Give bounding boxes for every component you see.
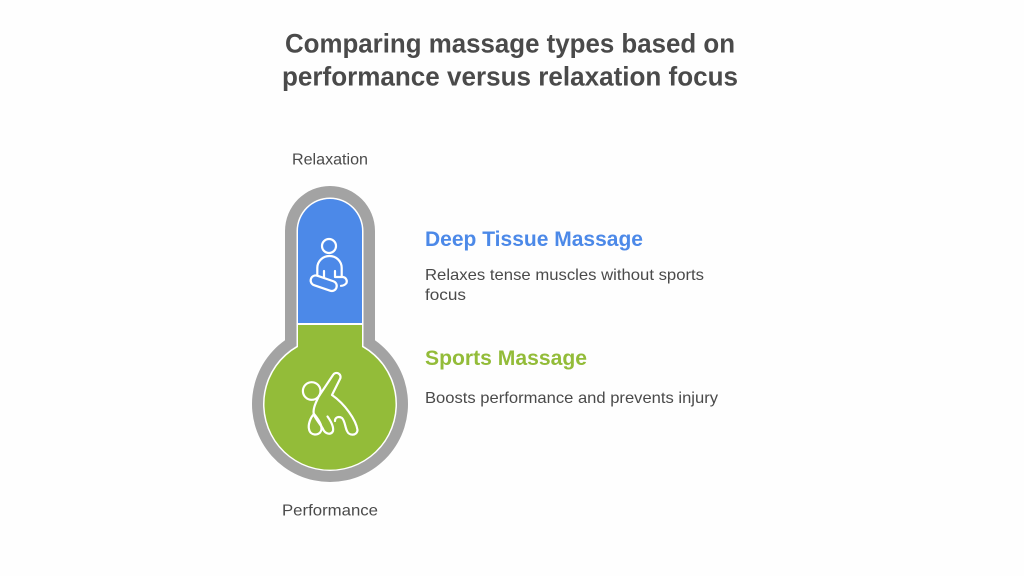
thermometer chart bbox=[252, 186, 408, 482]
icon: meditating person bbox=[309, 239, 347, 292]
text block: deep tissue massage bbox=[425, 227, 704, 304]
description: deep tissue massage: Relaxes tense muscles without sports bbox=[425, 267, 704, 284]
description: sports massage: Boosts performance and prevents injury bbox=[425, 390, 718, 407]
title: Comparing massage types based on bbox=[285, 28, 735, 58]
axis label: relaxation: Relaxation bbox=[292, 152, 368, 168]
thermometer outer shell bbox=[252, 186, 408, 482]
heading: sports massage: Sports Massage bbox=[425, 346, 587, 370]
axis label: performance: Performance bbox=[282, 502, 378, 520]
icon: stretching athlete bbox=[303, 373, 358, 435]
thermometer white outline bbox=[263, 197, 397, 471]
title: performance versus relaxation focus bbox=[282, 62, 738, 92]
segment: sports massage bbox=[264, 325, 396, 470]
title bbox=[282, 28, 738, 92]
text block: sports massage bbox=[425, 346, 718, 407]
description: deep tissue massage bbox=[425, 267, 704, 304]
segment: deep tissue massage bbox=[298, 199, 362, 323]
description: deep tissue massage: focus bbox=[425, 287, 466, 304]
heading: deep tissue massage: Deep Tissue Massage bbox=[425, 227, 643, 251]
